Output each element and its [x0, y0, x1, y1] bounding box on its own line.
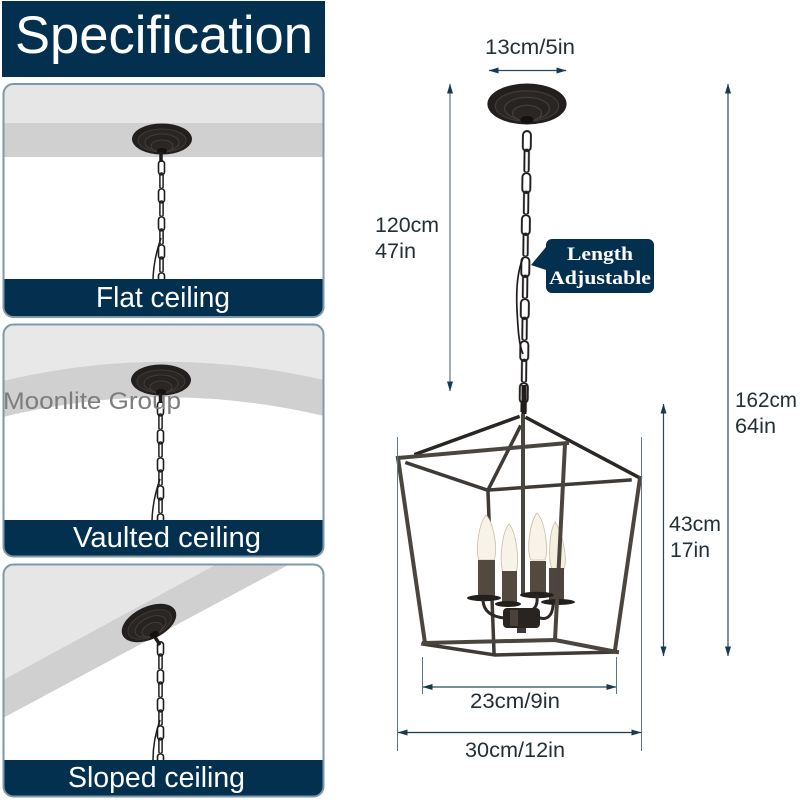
dimension: canopy width: [485, 36, 575, 70]
dimension: chain length: 120cm: [375, 214, 439, 237]
lantern frame: [398, 416, 640, 655]
dimension: bottom width: [422, 657, 616, 713]
caption: vaulted ceiling: Vaulted ceiling: [73, 522, 261, 554]
candles: [467, 513, 575, 607]
dimension: chain length: [375, 84, 450, 391]
callout: length adjustable: Length: [567, 244, 633, 265]
callout: length adjustable: Adjustable: [549, 268, 651, 289]
panel: sloped ceiling: [3, 564, 324, 797]
callout: length adjustable: [531, 239, 654, 293]
caption: flat ceiling: Flat ceiling: [96, 282, 230, 314]
dimension: total height: 64in: [735, 415, 776, 438]
panel: flat ceiling: [3, 83, 324, 317]
dimension: lantern height: 43cm: [669, 513, 721, 536]
title banner: Specification: [15, 6, 313, 65]
dimension: total height: [728, 84, 797, 656]
watermark: Moonlite Group: [3, 388, 181, 415]
dimension: canopy width: 13cm/5in: [485, 36, 575, 59]
dimension: top width: [398, 437, 642, 762]
candle arms and hub: [483, 597, 553, 618]
dimension: lantern height: 17in: [670, 539, 710, 562]
chandelier: [398, 84, 640, 655]
panel: vaulted ceiling: [3, 324, 324, 557]
dimension: lantern height: [664, 404, 721, 656]
dimension: total height: 162cm: [735, 389, 797, 412]
dimension: bottom width: 23cm/9in: [470, 690, 560, 713]
dimension: chain length: 47in: [375, 240, 416, 263]
caption: sloped ceiling: Sloped ceiling: [68, 762, 245, 794]
chain: [517, 130, 533, 414]
dimension: top width: 30cm/12in: [465, 739, 565, 762]
ceiling canopy: [487, 84, 567, 124]
